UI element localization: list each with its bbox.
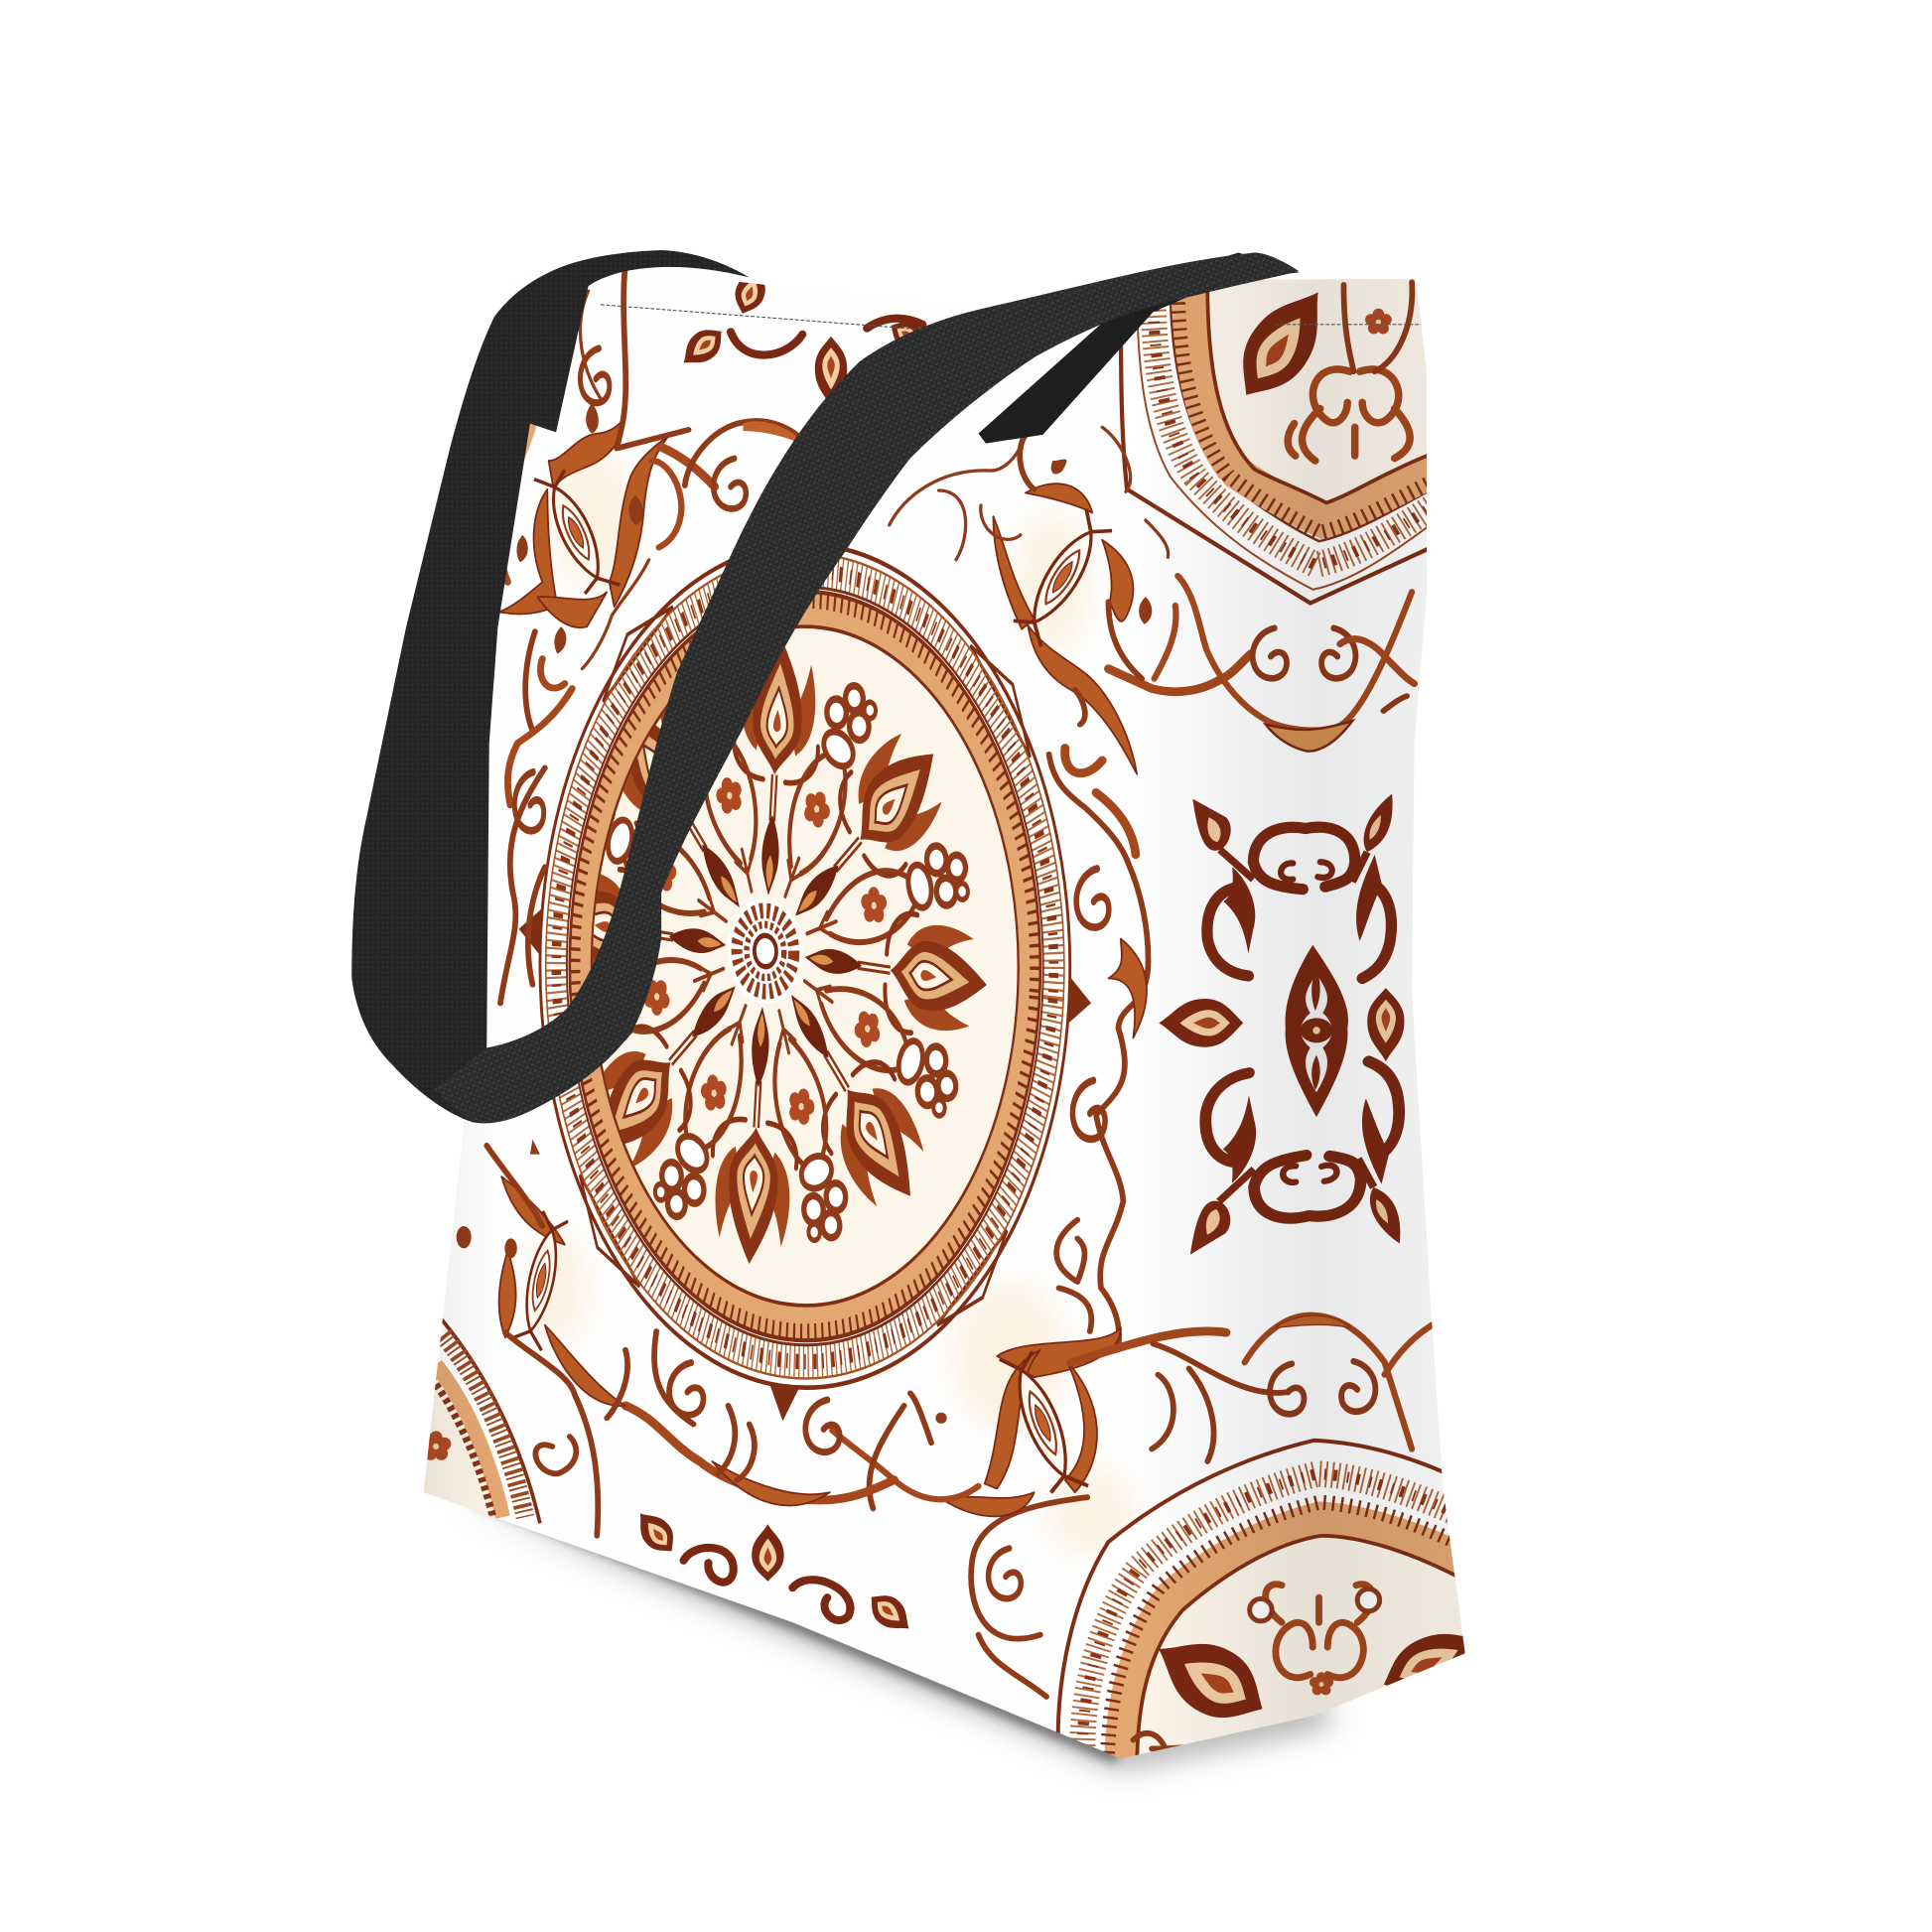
frame heart right [1367,988,1405,1061]
medallion flower bud [1243,292,1318,395]
cream tint patches [526,452,1133,1555]
panel: top left partial medallion [524,423,536,460]
frame top half [1192,794,1393,978]
strap: left band [351,250,750,1122]
vine: right vertical [1049,748,1148,1350]
vine: top left lotus [499,264,805,1003]
panel: top right medallion [1118,278,1428,606]
medallion bud left [1160,1644,1263,1718]
vine: bottom arc [625,1362,978,1508]
medallion bud right [1384,1634,1465,1686]
frame bottom half [1190,1059,1400,1260]
fabric shading: multiply overlay [423,278,1463,1739]
vine: lower left lotus [457,1140,694,1536]
panel: bottom left partial medallion [423,1318,542,1524]
ornament: centre right frame [1159,794,1405,1260]
strap [351,250,1300,1123]
ground shadow under bag [459,1496,1337,1768]
panel: bottom right medallion [1058,1441,1493,1771]
bag body [423,270,1465,1759]
medallion heart scroll [1133,1585,1380,1748]
vine: top right lotus [890,427,1415,774]
vine: bottom right lotus [941,1315,1443,1697]
ornament: top centre fleuron [683,282,927,399]
top stitching [601,305,1425,332]
central mandala [518,548,1091,1422]
mandala rosette [593,646,987,1264]
strap: front band [434,252,1300,1123]
product photo: tote bag [351,250,1465,1784]
strap: right tab [978,252,1300,444]
frame bud left [1159,999,1243,1047]
ornament: bottom centre fleuron [639,1513,909,1628]
medallion heart scroll [1288,282,1412,461]
fabric base [371,235,1511,1796]
frame centre figure [1286,945,1348,1117]
mandala outer rings [518,548,1091,1422]
